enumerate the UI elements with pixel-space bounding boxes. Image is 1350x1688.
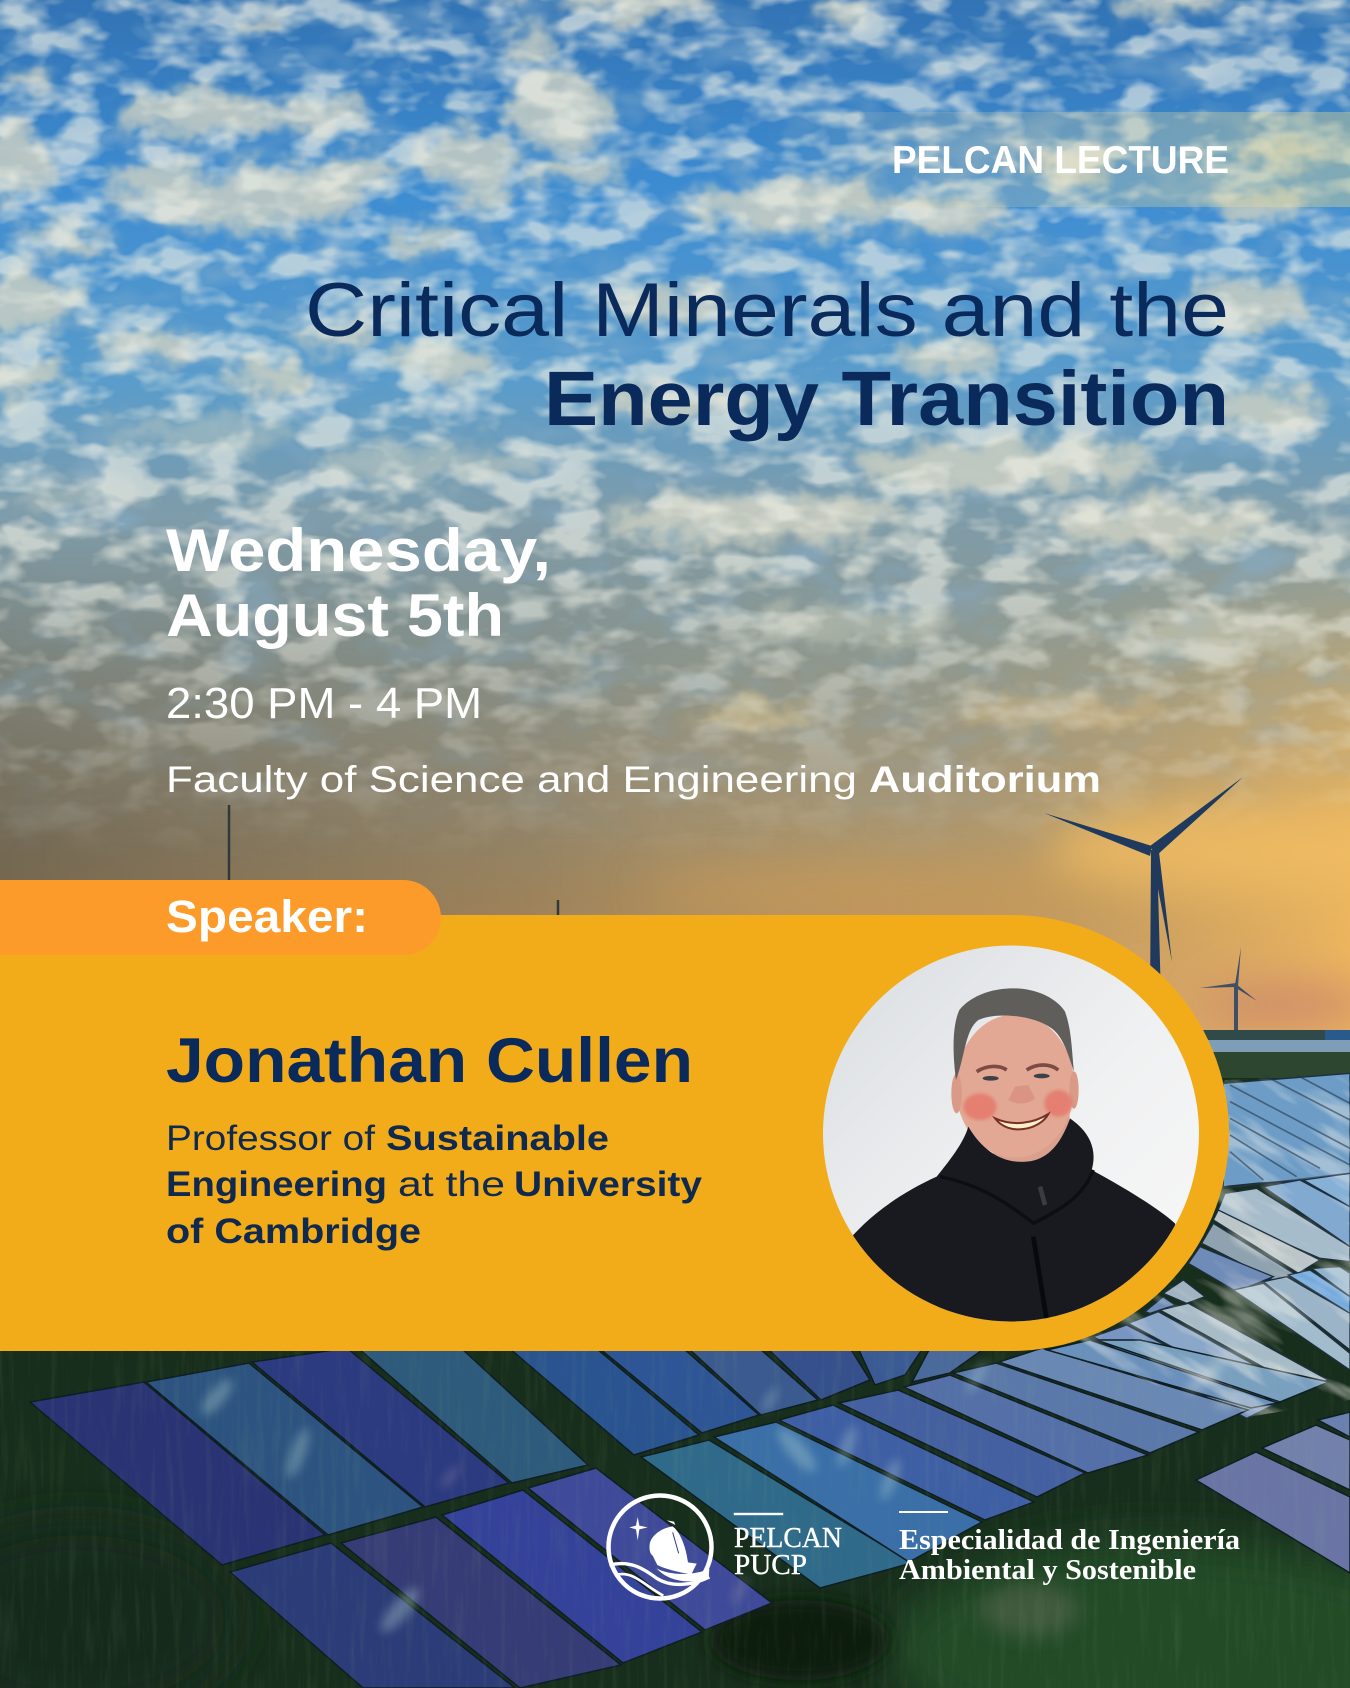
ship	[650, 1526, 697, 1574]
star	[629, 1517, 648, 1540]
date	[166, 517, 551, 649]
title: Energy Transition	[544, 356, 1229, 442]
panel reflections	[197, 1356, 1238, 1637]
hood and jacket	[853, 1118, 1176, 1322]
venue: Faculty of Science and Engineering	[166, 759, 857, 800]
logo text: specialty	[899, 1511, 1241, 1586]
ground and grass	[0, 1078, 1350, 1688]
speaker role: Engineering	[166, 1165, 387, 1204]
logo text: PELCAN PUCP: PELCAN	[734, 1522, 842, 1554]
horizon detail: water and far ground	[1190, 1030, 1350, 1078]
speaker role	[166, 1119, 703, 1251]
right array surface reflections	[1078, 1076, 1350, 1416]
small wind turbine	[1200, 947, 1257, 1030]
logo text: PELCAN PUCP: PUCP	[734, 1549, 807, 1581]
speaker tab	[0, 880, 441, 955]
speaker role: at the	[398, 1165, 505, 1204]
speaker role: Sustainable	[386, 1119, 609, 1158]
logo text: specialty: Ambiental y Sostenible	[899, 1554, 1196, 1586]
waves	[609, 1564, 709, 1584]
top label band	[760, 112, 1350, 207]
logo text: PELCAN PUCP	[734, 1513, 842, 1581]
solar panels: lower left and centre arrays	[30, 1340, 1350, 1688]
title: Critical Minerals and the	[305, 268, 1229, 353]
venue: Auditorium	[869, 759, 1101, 800]
logo: PELCAN PUCP emblem	[608, 1496, 712, 1598]
speaker label: Speaker:	[166, 891, 368, 942]
hair	[954, 988, 1074, 1080]
solar panels: right array	[1093, 1073, 1350, 1418]
date: Wednesday,	[166, 517, 551, 584]
venue	[166, 759, 1101, 800]
speaker role: University	[514, 1165, 703, 1204]
speaker role: Professor of	[166, 1119, 375, 1158]
smile	[995, 1114, 1048, 1129]
time: 2:30 PM - 4 PM	[166, 679, 482, 728]
neck	[992, 1113, 1070, 1162]
distant masts	[229, 805, 558, 920]
panel: speaker	[0, 880, 1229, 1351]
speaker name: Jonathan Cullen	[166, 1026, 693, 1096]
logo text: specialty: Especialidad de Ingeniería	[899, 1524, 1241, 1556]
title	[305, 268, 1229, 442]
speaker role: of Cambridge	[166, 1212, 421, 1251]
nose	[1008, 1085, 1035, 1104]
label: PELCAN LECTURE: PELCAN LECTURE	[892, 139, 1229, 182]
speaker portrait	[820, 940, 1205, 1330]
date: August 5th	[166, 582, 504, 649]
eyes and brows	[977, 1065, 1058, 1072]
warm horizon glow	[640, 805, 1350, 1027]
large wind turbine	[1044, 777, 1243, 1000]
face	[956, 1014, 1074, 1158]
